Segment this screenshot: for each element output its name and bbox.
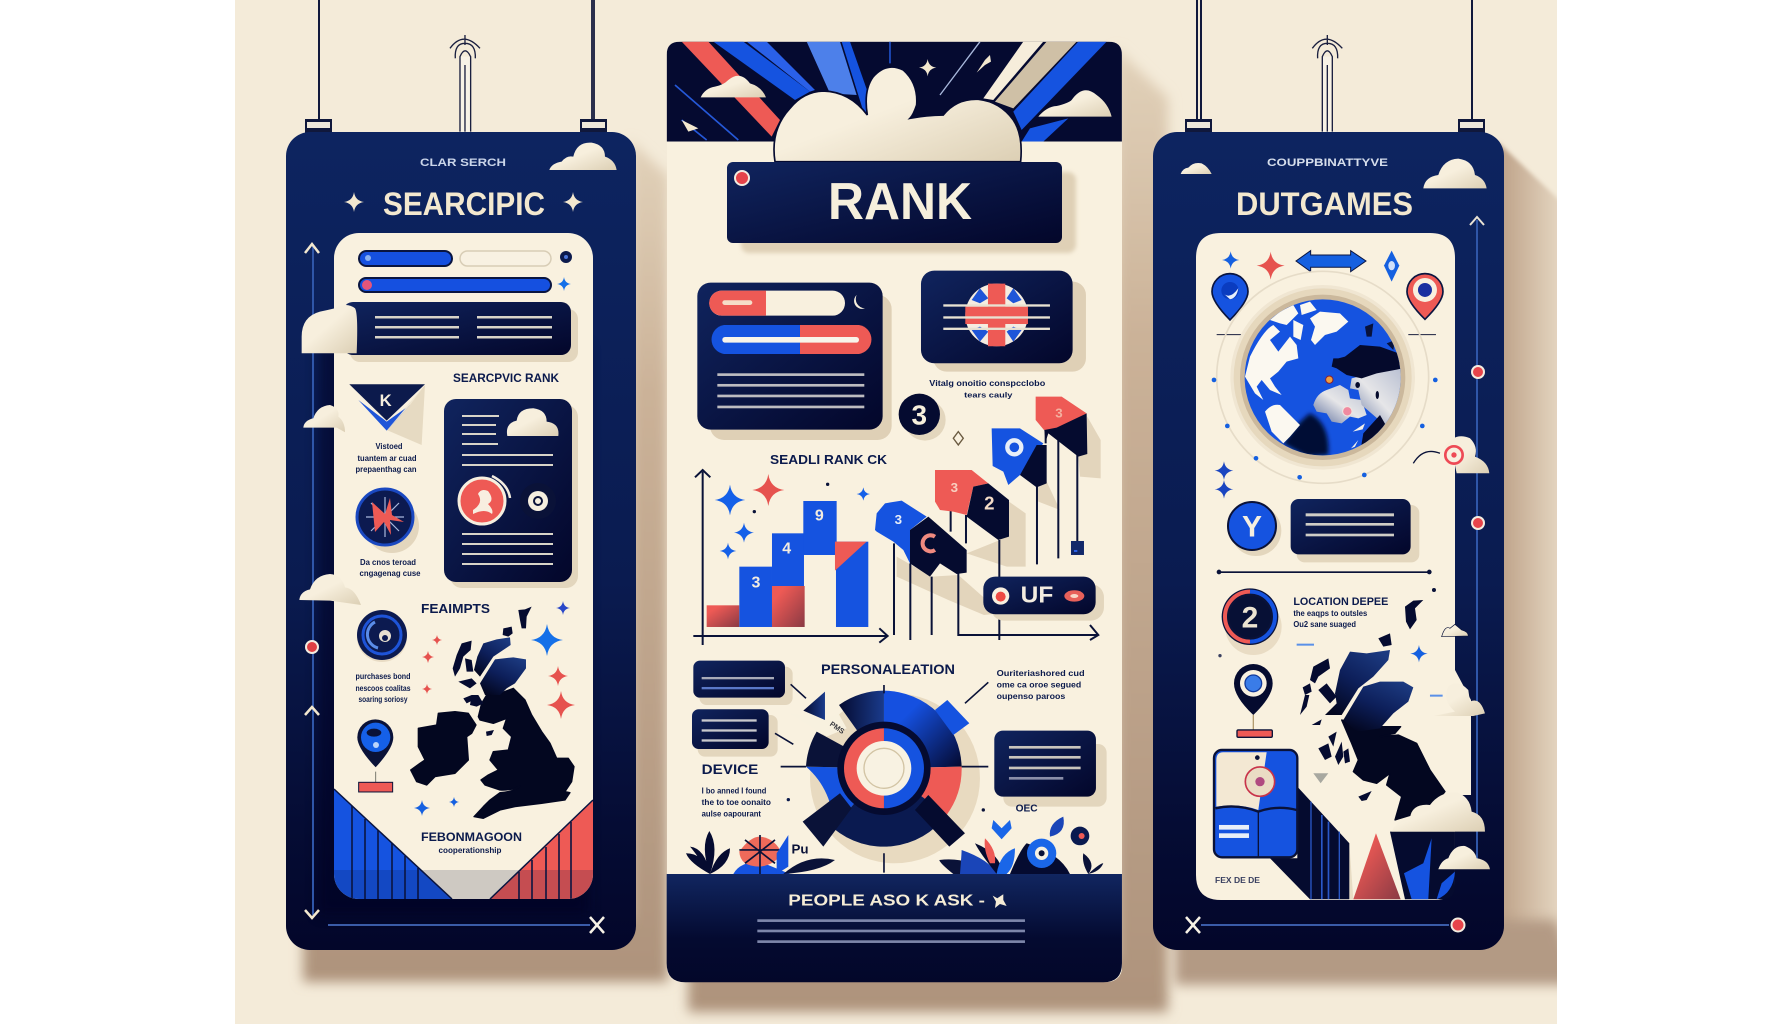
right top icons [1212,251,1443,335]
bar chart: 9 [815,508,824,525]
right antenna [1312,35,1342,132]
left note one: prepaenthag can [356,465,417,474]
left features heading: FEAIMPTS [421,601,490,616]
left personalisation caption: cooperationship [438,846,502,855]
rising flag markers: 2 [984,492,995,513]
left bottom banner [334,789,593,899]
left note one: tuantem ar cuad [358,454,417,463]
right info card [1291,499,1419,562]
left personalisation caption: FEBONMAGOON [421,830,522,844]
UK pill: UF [1021,582,1053,608]
number three badge [899,394,963,445]
device text: the to toe oonaito [702,798,771,807]
flag caption: Vitalg onoitio conspcclobo [929,379,1045,388]
centre panel shadow [688,48,1168,1012]
UK flag card [921,271,1086,372]
left panel inner shadow [318,345,588,915]
left cloud lower axis [303,405,345,432]
icon: V badge K: K [380,391,392,410]
panel: left search panel [286,0,668,982]
centre big cloud [774,67,1021,162]
device text: I bo anned I found [702,787,766,796]
panel: right location panel [1153,0,1580,985]
icon: Y badge [1228,502,1281,556]
left progress dot [306,641,318,653]
globe [1217,271,1429,483]
personalisation small cards [692,661,988,757]
left hanging wires and clips [305,0,607,136]
icon: Y badge: Y [1242,511,1262,544]
rank title band [727,162,1076,253]
left note one [356,442,417,474]
background [235,0,1557,1024]
rising flag markers: 3 [895,512,902,527]
location text block: Ou2 sane suaged [1293,620,1356,629]
icon: UK roundel [357,489,419,553]
rising flag markers [875,397,1101,640]
location text block: LOCATION DEPEE [1293,596,1388,608]
left note one: Vistoed [376,442,403,451]
footer heading: PEOPLE ASO K ASK - [788,892,985,909]
right bottom rule, close mark and dot [1186,917,1464,933]
centre header art [667,42,1122,142]
bar chart: 3 [752,574,761,591]
right axis dots [1472,366,1484,529]
right clouds top [1181,159,1487,188]
map: British Isles [411,607,574,818]
left heading: SEARCIPIC [383,186,545,222]
personalisation note: oupenso paroos [997,692,1066,701]
left note three: soaring soriosy [358,695,408,704]
icon: location pin two [1234,664,1273,737]
left search bars [359,251,572,292]
location text block: the eaqps to outsles [1293,609,1368,618]
left cloud on card [302,305,357,353]
left foliage: Pu [791,841,809,856]
right dark base with blue leaves [1270,787,1455,899]
left kicker: CLAR SERCH [420,157,506,169]
device text: DEVICE [702,761,758,777]
left inner sheet [334,233,593,899]
right device card: OEC [1016,804,1038,815]
right cloud with target [1413,436,1489,473]
personalisation note: Ouriteriashored cud [997,669,1085,678]
right inner sheet [1196,233,1471,900]
right panel body [1153,132,1504,950]
left note two [360,558,421,578]
right kicker: COUPPBINATTYVE [1267,157,1388,169]
footer band [667,874,1122,982]
icon: number two badge [1222,588,1282,655]
location text block [1293,596,1388,629]
right sparkle pair [1215,461,1233,499]
personalisation note [997,669,1085,701]
UK pill [983,577,1104,621]
centre panel body [667,42,1122,982]
right small marks [1218,588,1443,783]
left article card [444,399,578,588]
right vertical axis [1470,217,1484,860]
bar chart: 4 [782,540,791,557]
chart heading: SEADLI RANK CK [770,453,887,467]
right clouds lower [1392,624,1490,869]
left personalisation caption [421,830,522,855]
search card [697,283,892,440]
right foliage [939,817,1103,874]
infographic canvas [235,0,1557,1024]
icon: circular badge [357,610,407,662]
footer text lines [757,919,1025,943]
right footnote: FEX DE DE [1215,876,1261,885]
map: Scotland and northern England [1300,600,1445,820]
number three badge: 3 [912,399,927,430]
donut chart: PMS [828,719,846,736]
left note two: cngagenag cuse [360,569,421,578]
left vertical axis with arrows [305,244,319,918]
globe orbit dots [1212,378,1438,480]
left note two: Da cnos teroad [360,558,416,567]
blue device card [1214,750,1297,857]
left result card [343,302,578,362]
personalisation note: ome ca oroe segued [997,681,1081,690]
right heading: DUTGAMES [1236,186,1413,222]
left note three: nescoos coalitas [356,684,411,693]
donut chart [781,685,988,873]
left cloud side [299,574,361,605]
device text [702,761,790,818]
right hanging wires and clips [1185,0,1485,137]
left bottom rule and close mark [328,917,604,933]
rising flag markers: 3 [951,480,958,495]
left note three [356,672,411,704]
left foliage [686,831,835,874]
sparkles around map [414,601,575,816]
rank title band: RANK [828,173,972,231]
icon: V badge K [349,384,425,445]
left panel shadow [303,140,668,982]
bar chart [693,470,888,645]
icon: number two badge: 2 [1242,601,1258,634]
left note three: purchases bond [356,672,411,681]
left panel body [286,132,636,950]
right panel shadow [1175,142,1580,985]
left cloud top [549,143,617,170]
flag caption [929,379,1045,400]
rising flag markers: 3 [1055,405,1063,420]
right divider [1217,570,1432,574]
left antenna [450,35,480,132]
personalisation heading: PERSONALEATION [821,661,955,677]
panel: centre rank panel [667,42,1168,1012]
flag caption: tears cauly [964,391,1014,400]
device text: aulse oapourant [702,809,761,818]
icon: location pin with base [357,719,393,792]
left sub heading: SEARCPVIC RANK [453,371,559,385]
right device card [982,731,1107,815]
